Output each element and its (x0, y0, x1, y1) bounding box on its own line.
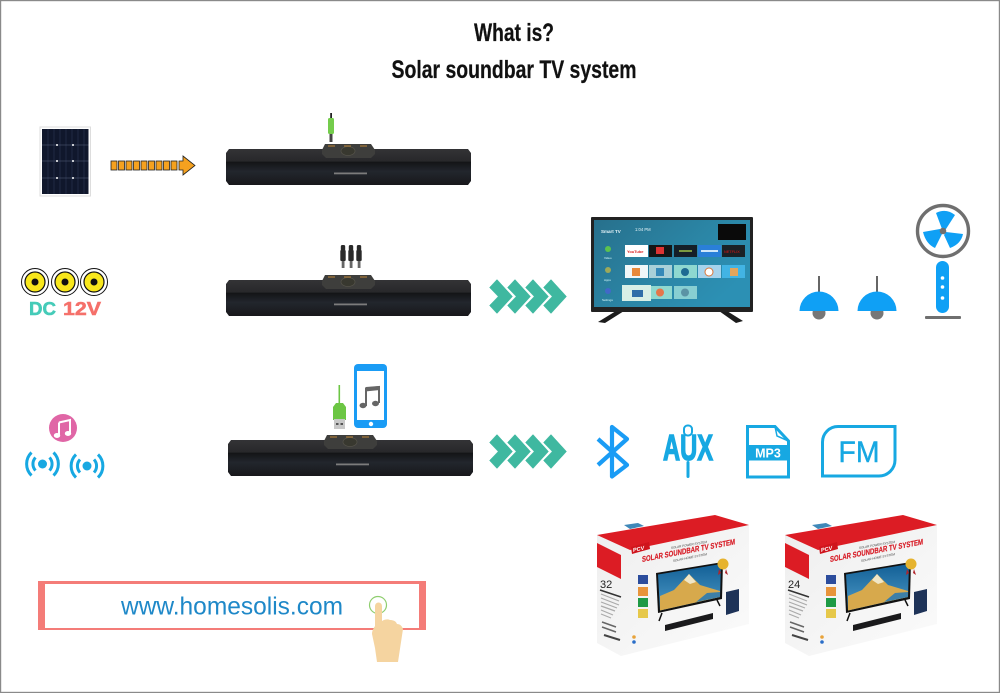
icon: AUX: AUX (663, 427, 713, 468)
product box: 24 inch: PCV (821, 546, 833, 554)
icon: FM (822, 426, 895, 476)
icon: wireless signal right (71, 454, 103, 478)
product box: 24 inch (785, 515, 937, 656)
icon: wireless signal left (27, 452, 58, 476)
product box: 24 inch: SOLAR POWER SYSTEM (859, 540, 895, 550)
icon: smart TV: Video (604, 256, 612, 260)
icon: lamp 1 (800, 276, 838, 320)
product box: 32 inch: PCV (633, 546, 645, 554)
icon: smart TV (591, 217, 753, 323)
icon: MP3 file (747, 426, 789, 477)
product box: 24 inch: SOLAR SOUNDBAR TV SYSTEM (830, 537, 923, 564)
soundbar: row 3 (228, 435, 473, 476)
label: DC 12V: DC (29, 299, 56, 319)
icon: smart TV: NETFLIX (724, 250, 740, 254)
product box: 32 inch: SOLAR SOUNDBAR TV SYSTEM (642, 537, 735, 564)
icon: green DC plug (328, 113, 334, 142)
icon: lamp 2 (858, 276, 896, 320)
product box: 32 inch (597, 515, 749, 656)
title (392, 19, 636, 84)
icon: FM: FM (838, 436, 880, 469)
icon: USB plug (333, 385, 346, 429)
product box: 24 inch: SOLAR HOME SYSTEM (861, 552, 895, 563)
icon: smart TV: Settings (602, 298, 613, 302)
icon: music note badge (49, 414, 77, 442)
icon: smart TV: Smart TV (601, 229, 621, 234)
icon: pointing hand (370, 596, 403, 662)
icon: smart TV: Apps (604, 278, 611, 282)
title: Solar soundbar TV system (392, 56, 636, 84)
icon: DC 12V sockets (22, 268, 108, 319)
arrow: chevrons row 3 (489, 434, 567, 469)
website url: www.homesolis.com (120, 592, 343, 620)
icon: standing fan (918, 206, 968, 319)
website link box (38, 581, 426, 630)
label: DC 12V: 12V (63, 299, 101, 319)
soundbar: row 2 (226, 275, 471, 316)
product box: 32 inch: SOLAR POWER SYSTEM (671, 540, 707, 550)
icon: solar panel (40, 127, 90, 196)
icon: phone with music note (354, 364, 387, 428)
arrow: chevrons row 2 (489, 279, 567, 314)
arrow: solar to soundbar (111, 156, 195, 175)
icon: three DC plugs (340, 245, 362, 268)
product box: 32 inch: 32 (600, 579, 612, 591)
soundbar: row 1 (226, 144, 471, 185)
icon: smart TV: YouTube (627, 249, 644, 254)
title: What is? (474, 19, 554, 47)
product box: 24 inch: 24 (788, 579, 800, 591)
product box: 32 inch: SOLAR HOME SYSTEM (673, 552, 707, 563)
icon: smart TV: 1:04 PM (635, 227, 651, 232)
icon: MP3 file: MP3 (755, 446, 781, 460)
icon: AUX (663, 426, 713, 478)
icon: bluetooth (598, 427, 627, 476)
